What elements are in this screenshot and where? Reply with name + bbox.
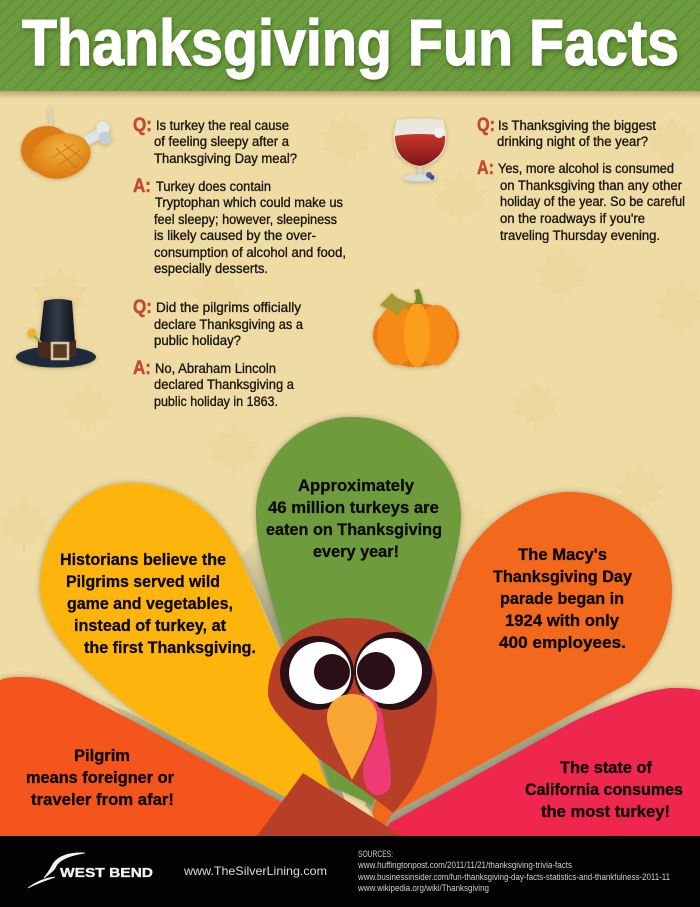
text: pilgrim meaning: traveler from afar! — [31, 790, 174, 809]
sources: www.wikipedia.org/wiki/Thanksgiving — [357, 883, 489, 893]
question and answer: drinking: traveling Thursday evening. — [500, 228, 660, 243]
text: pilgrim meaning — [26, 746, 174, 809]
panel: wild game petal — [40, 483, 345, 836]
question and answer: turkey: Turkey does contain — [156, 179, 271, 194]
question and answer: turkey: Thanksgiving Day meal? — [154, 151, 297, 166]
panel: California petal — [380, 688, 700, 836]
question and answer: holiday: public holiday? — [154, 333, 241, 348]
question and answer: holiday: No, Abraham Lincoln — [155, 361, 276, 376]
text: turkeys eaten: eaten on Thanksgiving — [266, 520, 442, 539]
icon: pilgrim hat — [16, 299, 96, 368]
text: parade: parade began in — [500, 589, 624, 608]
question and answer: drinking: drinking night of the year? — [497, 134, 648, 149]
question and answer: drinking: Is Thanksgiving the biggest — [498, 118, 656, 133]
text: wild game: the first Thanksgiving. — [84, 638, 256, 657]
question and answer: holiday: Q: — [133, 297, 152, 318]
text: wild game: Historians believe the — [60, 550, 226, 569]
question and answer: holiday: Did the pilgrims officially — [156, 300, 301, 315]
website: www.TheSilverLining.com — [183, 864, 327, 878]
question and answer: drinking: on the roadways if you're — [500, 211, 645, 226]
question and answer: holiday: declare Thanksgiving as a — [154, 317, 303, 332]
logo: West Bend: WEST BEND — [60, 865, 153, 880]
question and answer: drinking: A: — [477, 158, 494, 179]
question and answer: holiday — [133, 297, 303, 409]
sources: www.huffingtonpost.com/2011/11/21/thanksgiving-trivia-facts — [357, 860, 572, 870]
wattle — [360, 693, 391, 795]
icon: roast turkey leg — [21, 107, 112, 185]
footer bar — [0, 836, 700, 907]
beak — [327, 694, 377, 780]
text: wild game: instead of turkey, at — [74, 616, 226, 635]
question and answer: drinking: Q: — [477, 115, 495, 136]
text: California: The state of — [560, 758, 652, 777]
question and answer: drinking: Yes, more alcohol is consumed — [498, 161, 674, 176]
icon: wine glass — [394, 118, 446, 182]
icon: pumpkin — [373, 289, 459, 367]
question and answer: holiday: A: — [133, 358, 151, 379]
text: turkeys eaten: every year! — [313, 542, 399, 561]
turkey body — [257, 773, 402, 836]
question and answer: holiday: public holiday in 1863. — [154, 394, 278, 409]
text: parade: 400 employees. — [499, 633, 626, 652]
panel: turkeys eaten petal — [256, 417, 461, 805]
question and answer: turkey — [133, 115, 346, 276]
text: California: the most turkey! — [541, 802, 670, 821]
text: turkeys eaten — [266, 476, 442, 561]
sources — [357, 849, 670, 893]
question and answer: drinking: on Thanksgiving than any other — [500, 178, 682, 193]
sources: SOURCES: — [358, 849, 393, 859]
text: parade: Thanksgiving Day — [493, 567, 633, 586]
turkey head — [268, 618, 437, 813]
question and answer: turkey: especially desserts. — [154, 261, 268, 276]
logo: West Bend — [28, 853, 153, 888]
question and answer: turkey: Q: — [133, 115, 152, 136]
left eye — [280, 636, 354, 710]
text: turkeys eaten: Approximately — [298, 476, 415, 495]
question and answer: drinking — [477, 115, 685, 243]
question and answer: turkey: Is turkey the real cause — [156, 118, 289, 133]
question and answer: holiday: declared Thanksgiving a — [154, 377, 294, 392]
panel: Macy's parade petal — [368, 492, 672, 826]
question and answer: turkey: feel sleepy; however, sleepiness — [154, 212, 337, 227]
question and answer: turkey: is likely caused by the over- — [154, 228, 316, 243]
text: wild game: Pilgrims served wild — [66, 572, 220, 591]
text: parade — [493, 545, 633, 652]
question and answer: drinking: holiday of the year. So be careful — [500, 194, 685, 209]
text: parade: The Macy's — [518, 545, 607, 564]
question and answer: turkey: A: — [133, 176, 151, 197]
question and answer: turkey: consumption of alcohol and food, — [154, 245, 346, 260]
title banner — [0, 0, 700, 99]
text: wild game — [60, 550, 256, 657]
panel: pilgrim meaning petal — [0, 677, 310, 836]
text: pilgrim meaning: means foreigner or — [26, 768, 174, 787]
text: pilgrim meaning: Pilgrim — [74, 746, 130, 765]
turkey character — [257, 618, 437, 836]
question and answer: turkey: Tryptophan which could make us — [155, 195, 343, 210]
text: wild game: game and vegetables, — [67, 594, 233, 613]
text: California: California consumes — [525, 780, 683, 799]
text: California — [525, 758, 683, 821]
text: parade: 1924 with only — [505, 611, 620, 630]
question and answer: turkey: of feeling sleepy after a — [154, 134, 289, 149]
text: turkeys eaten: 46 million turkeys are — [268, 498, 439, 517]
right eye — [354, 632, 432, 710]
